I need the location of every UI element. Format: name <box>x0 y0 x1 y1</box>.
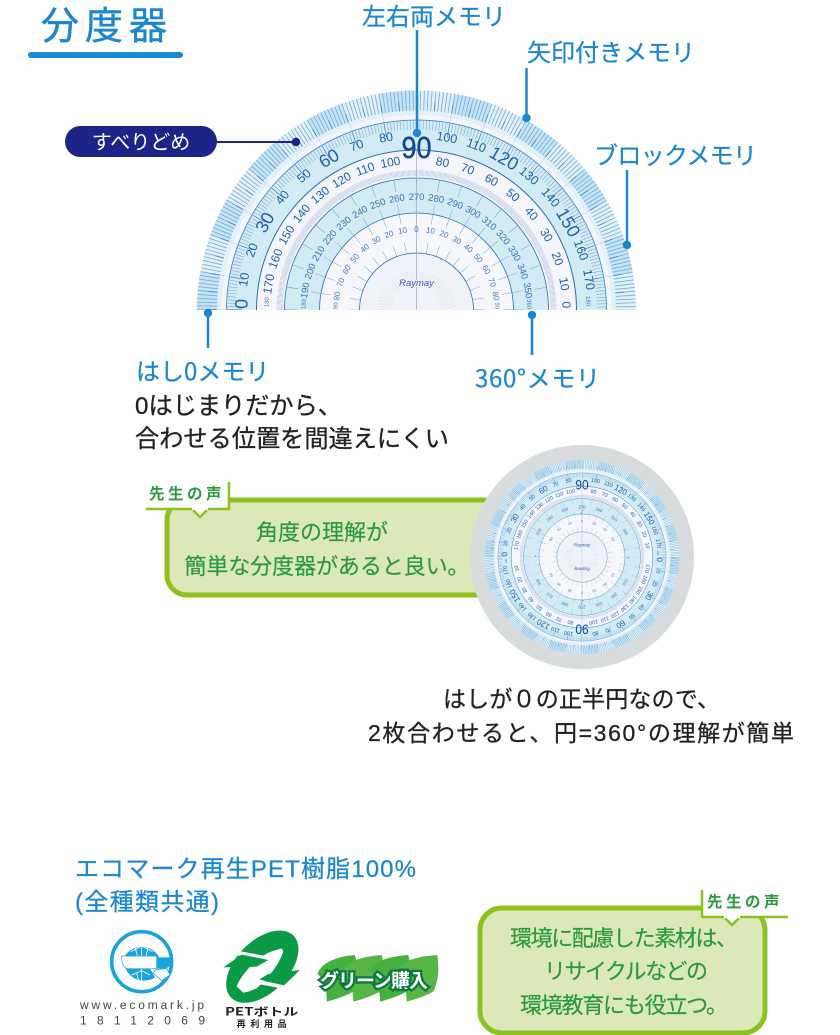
360 degree scale numbers: 350 <box>520 282 534 299</box>
tag: 先生の声: 先生の声 <box>707 890 783 912</box>
lower protractor: 310 <box>545 591 554 600</box>
centre scale numbers: 10 <box>397 225 408 236</box>
outer scale numbers: 180 <box>584 296 591 307</box>
upper protractor: 160 <box>516 529 525 540</box>
lower protractor: 210 <box>621 578 629 587</box>
callout: 360°メモリ <box>475 311 600 394</box>
outer scale numbers: 160 <box>571 238 591 262</box>
centre scale numbers: 20 <box>383 228 395 240</box>
inner scale numbers: 50 <box>503 185 523 205</box>
upper protractor: 110 <box>603 481 613 489</box>
lower protractor: 0 <box>581 591 583 595</box>
lower protractor: 40 <box>602 581 608 587</box>
upper protractor: 30 <box>509 512 521 524</box>
outer scale numbers: 140 <box>538 185 563 210</box>
lower protractor: 20 <box>650 579 658 587</box>
lower protractor: 180 <box>504 558 508 563</box>
text: はし0 description: 合わせる位置を間違えにくい <box>135 426 449 453</box>
360 degree scale numbers: 180 <box>301 298 308 309</box>
upper protractor: 290 <box>595 506 604 514</box>
inner scale numbers: 120 <box>329 169 354 191</box>
inner scale numbers: 30 <box>537 226 556 245</box>
lower protractor: 150 <box>634 585 644 595</box>
lower protractor: 40 <box>556 581 562 587</box>
lower protractor: 60 <box>548 572 554 577</box>
upper protractor: 20 <box>506 527 514 535</box>
centre scale numbers: 30 <box>370 234 383 246</box>
PET mark caption <box>225 1004 298 1030</box>
360 degree scale numbers: 340 <box>514 262 530 281</box>
circle made from two protractors <box>470 445 694 669</box>
lower protractor: Raymay <box>573 567 590 572</box>
outer scale numbers: 150 <box>552 204 584 241</box>
callout: 左右両メモリ <box>362 0 506 137</box>
upper protractor: 100 <box>590 478 600 485</box>
centre scale numbers: 30 <box>451 234 463 247</box>
panel: teacher voice 2 <box>480 890 788 1033</box>
upper protractor: 180 <box>656 551 660 556</box>
upper protractor: 150 <box>520 519 530 529</box>
centre scale numbers: 80 <box>491 291 501 302</box>
centre scale numbers: 20 <box>438 229 450 240</box>
360 degree scale numbers: 230 <box>335 215 354 233</box>
lower protractor: 70 <box>556 615 563 623</box>
PET mark caption: 再利用品 <box>237 1017 287 1030</box>
upper protractor: 150 <box>642 510 657 527</box>
lower protractor: 120 <box>535 616 551 631</box>
lower protractor: 50 <box>627 612 636 620</box>
upper protractor: 270 <box>579 504 586 509</box>
360 degree scale numbers: 360 <box>525 299 532 310</box>
centre scale numbers: 40 <box>462 242 475 255</box>
lower protractor: 60 <box>610 572 616 578</box>
upper protractor: 230 <box>545 514 555 523</box>
ecomark url and number: www.ecomark.jp <box>79 998 204 1012</box>
inner scale numbers: 130 <box>308 183 332 207</box>
centre scale numbers: 70 <box>335 276 347 288</box>
upper protractor: 120 <box>544 495 555 505</box>
lower protractor: 50 <box>536 603 544 612</box>
upper protractor: Raymay <box>574 542 591 547</box>
teacher comment text <box>184 520 470 579</box>
lower protractor: 100 <box>564 629 574 636</box>
lower protractor: 20 <box>567 588 572 593</box>
outer scale numbers: 80 <box>378 130 394 146</box>
ecomark url and number <box>79 998 205 1027</box>
360 degree scale numbers: 270 <box>409 192 424 203</box>
lower protractor: 10 <box>514 565 521 572</box>
upper protractor: 330 <box>622 528 630 537</box>
lower protractor: 30 <box>643 590 655 602</box>
360 degree scale numbers: 300 <box>463 204 482 221</box>
lower protractor: 40 <box>527 595 536 603</box>
heading: material <box>75 856 416 916</box>
360 degree scale numbers: 200 <box>303 262 319 281</box>
inner scale numbers: 20 <box>549 250 566 268</box>
360 degree scale numbers: 320 <box>493 228 512 247</box>
lower protractor <box>485 460 679 654</box>
inner scale numbers: 100 <box>379 154 402 171</box>
lower protractor: 120 <box>609 609 620 619</box>
outer scale numbers: 100 <box>435 129 458 146</box>
lower protractor: 10 <box>654 567 661 574</box>
upper protractor: 130 <box>534 502 545 512</box>
lower protractor: 60 <box>614 618 627 630</box>
upper protractor: 90 <box>575 478 589 493</box>
outer scale numbers: 60 <box>315 145 343 172</box>
outer scale numbers: 20 <box>243 241 261 259</box>
360 degree scale numbers <box>299 192 534 310</box>
lower protractor: 160 <box>505 578 514 589</box>
centre scale numbers: 10 <box>425 226 436 236</box>
lower protractor: 290 <box>560 600 569 608</box>
callout: 矢印付きメモリ: 矢印付きメモリ <box>527 33 695 68</box>
upper protractor: 80 <box>590 489 597 496</box>
icon: green purchasing mark <box>317 955 438 1002</box>
text: はし0 description <box>135 393 449 453</box>
inner scale numbers: 70 <box>459 160 477 178</box>
upper protractor: 0 <box>500 551 509 557</box>
upper protractor: 170 <box>654 539 661 549</box>
lower protractor: 70 <box>604 625 612 633</box>
inner scale numbers: 160 <box>266 247 286 271</box>
upper protractor: 40 <box>628 511 637 519</box>
icon: ecomark <box>79 932 205 1027</box>
text: circle caption: 2枚合わせると、円=360°の理解が簡単 <box>368 720 794 746</box>
inner scale numbers: 40 <box>522 204 541 223</box>
360 degree scale numbers: 330 <box>505 244 523 263</box>
upper protractor: 60 <box>610 537 616 542</box>
upper protractor: 60 <box>611 496 619 504</box>
upper protractor: 30 <box>635 520 643 528</box>
text: circle caption: はしが０の正半円なので、 <box>443 686 720 712</box>
callout: すべりどめ: すべりどめ <box>92 126 190 155</box>
outer scale numbers: 50 <box>294 166 314 186</box>
icon: green purchasing mark: グリーン購入 <box>320 966 428 993</box>
360 degree scale numbers: 310 <box>479 215 498 233</box>
upper protractor: 20 <box>640 531 648 538</box>
outer scale numbers: 170 <box>580 268 598 291</box>
centre scale numbers: 60 <box>480 264 493 276</box>
360 degree scale numbers: 210 <box>310 244 328 263</box>
inner scale numbers: 60 <box>482 171 501 190</box>
icon: PET bottle recycling mark <box>213 917 312 1030</box>
inner scale numbers: 150 <box>276 223 298 247</box>
callout: 矢印付きメモリ <box>522 33 695 122</box>
panel: teacher voice 1 <box>146 482 512 595</box>
centre scale numbers: 0 <box>414 225 419 234</box>
upper protractor: 100 <box>566 489 576 496</box>
text: circle caption <box>368 686 794 746</box>
upper protractor: 60 <box>548 536 554 542</box>
upper protractor: 10 <box>503 540 510 547</box>
inner scale numbers: 180 <box>264 296 271 307</box>
upper protractor: 40 <box>602 527 608 533</box>
lower protractor: 110 <box>599 614 609 623</box>
upper protractor: 70 <box>601 491 608 499</box>
teacher comment text: リサイクルなどの <box>544 959 708 984</box>
outer scale numbers: 120 <box>486 142 522 175</box>
callout: ブロックメモリ: ブロックメモリ <box>594 136 757 171</box>
lower protractor: 80 <box>567 618 574 625</box>
text: はし0 description: 0はじまりだから、 <box>135 393 342 420</box>
360 degree scale numbers: 240 <box>351 204 370 221</box>
upper protractor: 250 <box>561 506 570 513</box>
inner scale numbers: 0 <box>559 301 574 309</box>
360 degree scale numbers: 190 <box>299 282 313 299</box>
upper protractor: 20 <box>592 521 597 526</box>
inner scale numbers: 140 <box>290 201 314 226</box>
outer scale numbers: 70 <box>348 137 366 155</box>
teacher comment text: 環境に配慮した素材は、 <box>510 926 738 951</box>
outer scale numbers: 110 <box>465 136 488 156</box>
outer scale numbers: 40 <box>273 188 292 207</box>
teacher comment text: 簡単な分度器があると良い。 <box>184 554 470 579</box>
360 degree scale numbers: 280 <box>427 192 445 206</box>
lower protractor: 160 <box>639 574 648 585</box>
teacher comment text: 角度の理解が <box>256 520 388 545</box>
upper protractor: 20 <box>567 521 572 526</box>
centre scale numbers: 70 <box>486 277 498 289</box>
lower protractor: 30 <box>521 586 529 594</box>
upper protractor: 310 <box>610 514 619 523</box>
upper protractor: 80 <box>565 478 572 485</box>
centre scale numbers: 60 <box>341 263 353 276</box>
lower protractor: 90 <box>575 621 589 636</box>
upper protractor: 120 <box>613 483 629 498</box>
upper protractor: 130 <box>626 493 637 503</box>
lower protractor: 330 <box>534 577 542 586</box>
centre scale numbers: 90 <box>333 302 340 309</box>
callout: 360°メモリ: 360°メモリ <box>475 359 600 394</box>
upper protractor: 110 <box>555 491 565 500</box>
lower protractor: 270 <box>578 605 585 610</box>
centre scale numbers <box>332 225 501 310</box>
upper protractor: 140 <box>636 502 646 513</box>
callout: ブロックメモリ <box>594 136 757 249</box>
lower protractor: 170 <box>643 564 650 573</box>
upper protractor: 40 <box>556 527 562 533</box>
lower protractor: 130 <box>619 602 630 612</box>
lower protractor: 110 <box>551 625 561 633</box>
protractor <box>197 90 636 530</box>
lower protractor: 140 <box>627 594 637 605</box>
heading: material: (全種類共通) <box>75 889 219 916</box>
callout: はし0メモリ <box>136 309 269 387</box>
outer scale numbers: 90 <box>401 132 432 165</box>
outer scale numbers: 30 <box>251 209 279 236</box>
teacher comment text: 環境教育にも役立つ。 <box>520 993 728 1018</box>
brand logo: Raymay <box>399 278 435 289</box>
inner scale numbers <box>260 154 574 309</box>
upper protractor: 0 <box>581 519 583 523</box>
PET mark caption: PETボトル <box>225 1004 298 1020</box>
360 degree scale numbers: 290 <box>446 196 464 212</box>
upper protractor: 60 <box>537 484 550 496</box>
lower protractor: 80 <box>592 629 599 636</box>
360 degree scale numbers: 260 <box>388 192 406 206</box>
outer scale numbers: 130 <box>516 164 542 188</box>
inner scale numbers: 170 <box>260 273 277 295</box>
teacher comment text <box>510 926 738 1018</box>
outer scale numbers: 10 <box>236 272 252 288</box>
lower protractor: 100 <box>588 618 598 625</box>
inner scale numbers: 110 <box>354 159 377 179</box>
lower protractor: 20 <box>592 588 597 593</box>
lower protractor: 0 <box>655 557 664 563</box>
upper protractor: 170 <box>514 541 521 550</box>
upper protractor: 210 <box>535 527 543 536</box>
callout: すべりどめ <box>65 126 300 157</box>
ecomark url and number: 18112069 <box>80 1013 205 1027</box>
centre scale numbers: 50 <box>472 252 485 265</box>
lower protractor: 170 <box>503 565 510 575</box>
upper protractor <box>485 460 679 654</box>
lower protractor: 230 <box>609 591 619 600</box>
360 degree scale numbers: 220 <box>321 228 340 247</box>
callout: はし0メモリ: はし0メモリ <box>136 352 269 387</box>
lower protractor: 20 <box>516 576 524 583</box>
centre scale numbers: 50 <box>349 252 361 265</box>
heading: material: エコマーク再生PET樹脂100% <box>75 856 416 883</box>
lower protractor: 130 <box>527 611 538 621</box>
lower protractor: 140 <box>518 601 528 612</box>
centre scale numbers: 40 <box>358 242 371 255</box>
upper protractor: 140 <box>527 509 537 520</box>
centre scale numbers: 90 <box>493 302 500 310</box>
lower protractor: 150 <box>507 587 522 604</box>
outer scale numbers <box>231 129 598 309</box>
upper protractor: 50 <box>620 502 628 511</box>
upper protractor: 50 <box>528 494 537 502</box>
lower protractor: 250 <box>594 601 603 608</box>
upper protractor: 10 <box>643 542 650 549</box>
tag: 先生の声 <box>146 482 229 518</box>
tag: 先生の声: 先生の声 <box>149 482 225 504</box>
inner scale numbers: 80 <box>435 154 451 170</box>
lower protractor: 40 <box>637 602 645 611</box>
tag: 先生の声 <box>702 890 788 926</box>
lower protractor: 60 <box>545 610 553 618</box>
upper protractor: 70 <box>552 481 560 489</box>
outer scale numbers: 0 <box>231 299 252 309</box>
360 degree scale numbers: 250 <box>369 196 387 212</box>
upper protractor: 160 <box>650 525 659 536</box>
inner scale numbers: 10 <box>556 276 572 292</box>
upper protractor: 40 <box>519 503 527 512</box>
centre scale numbers: 80 <box>332 290 343 301</box>
